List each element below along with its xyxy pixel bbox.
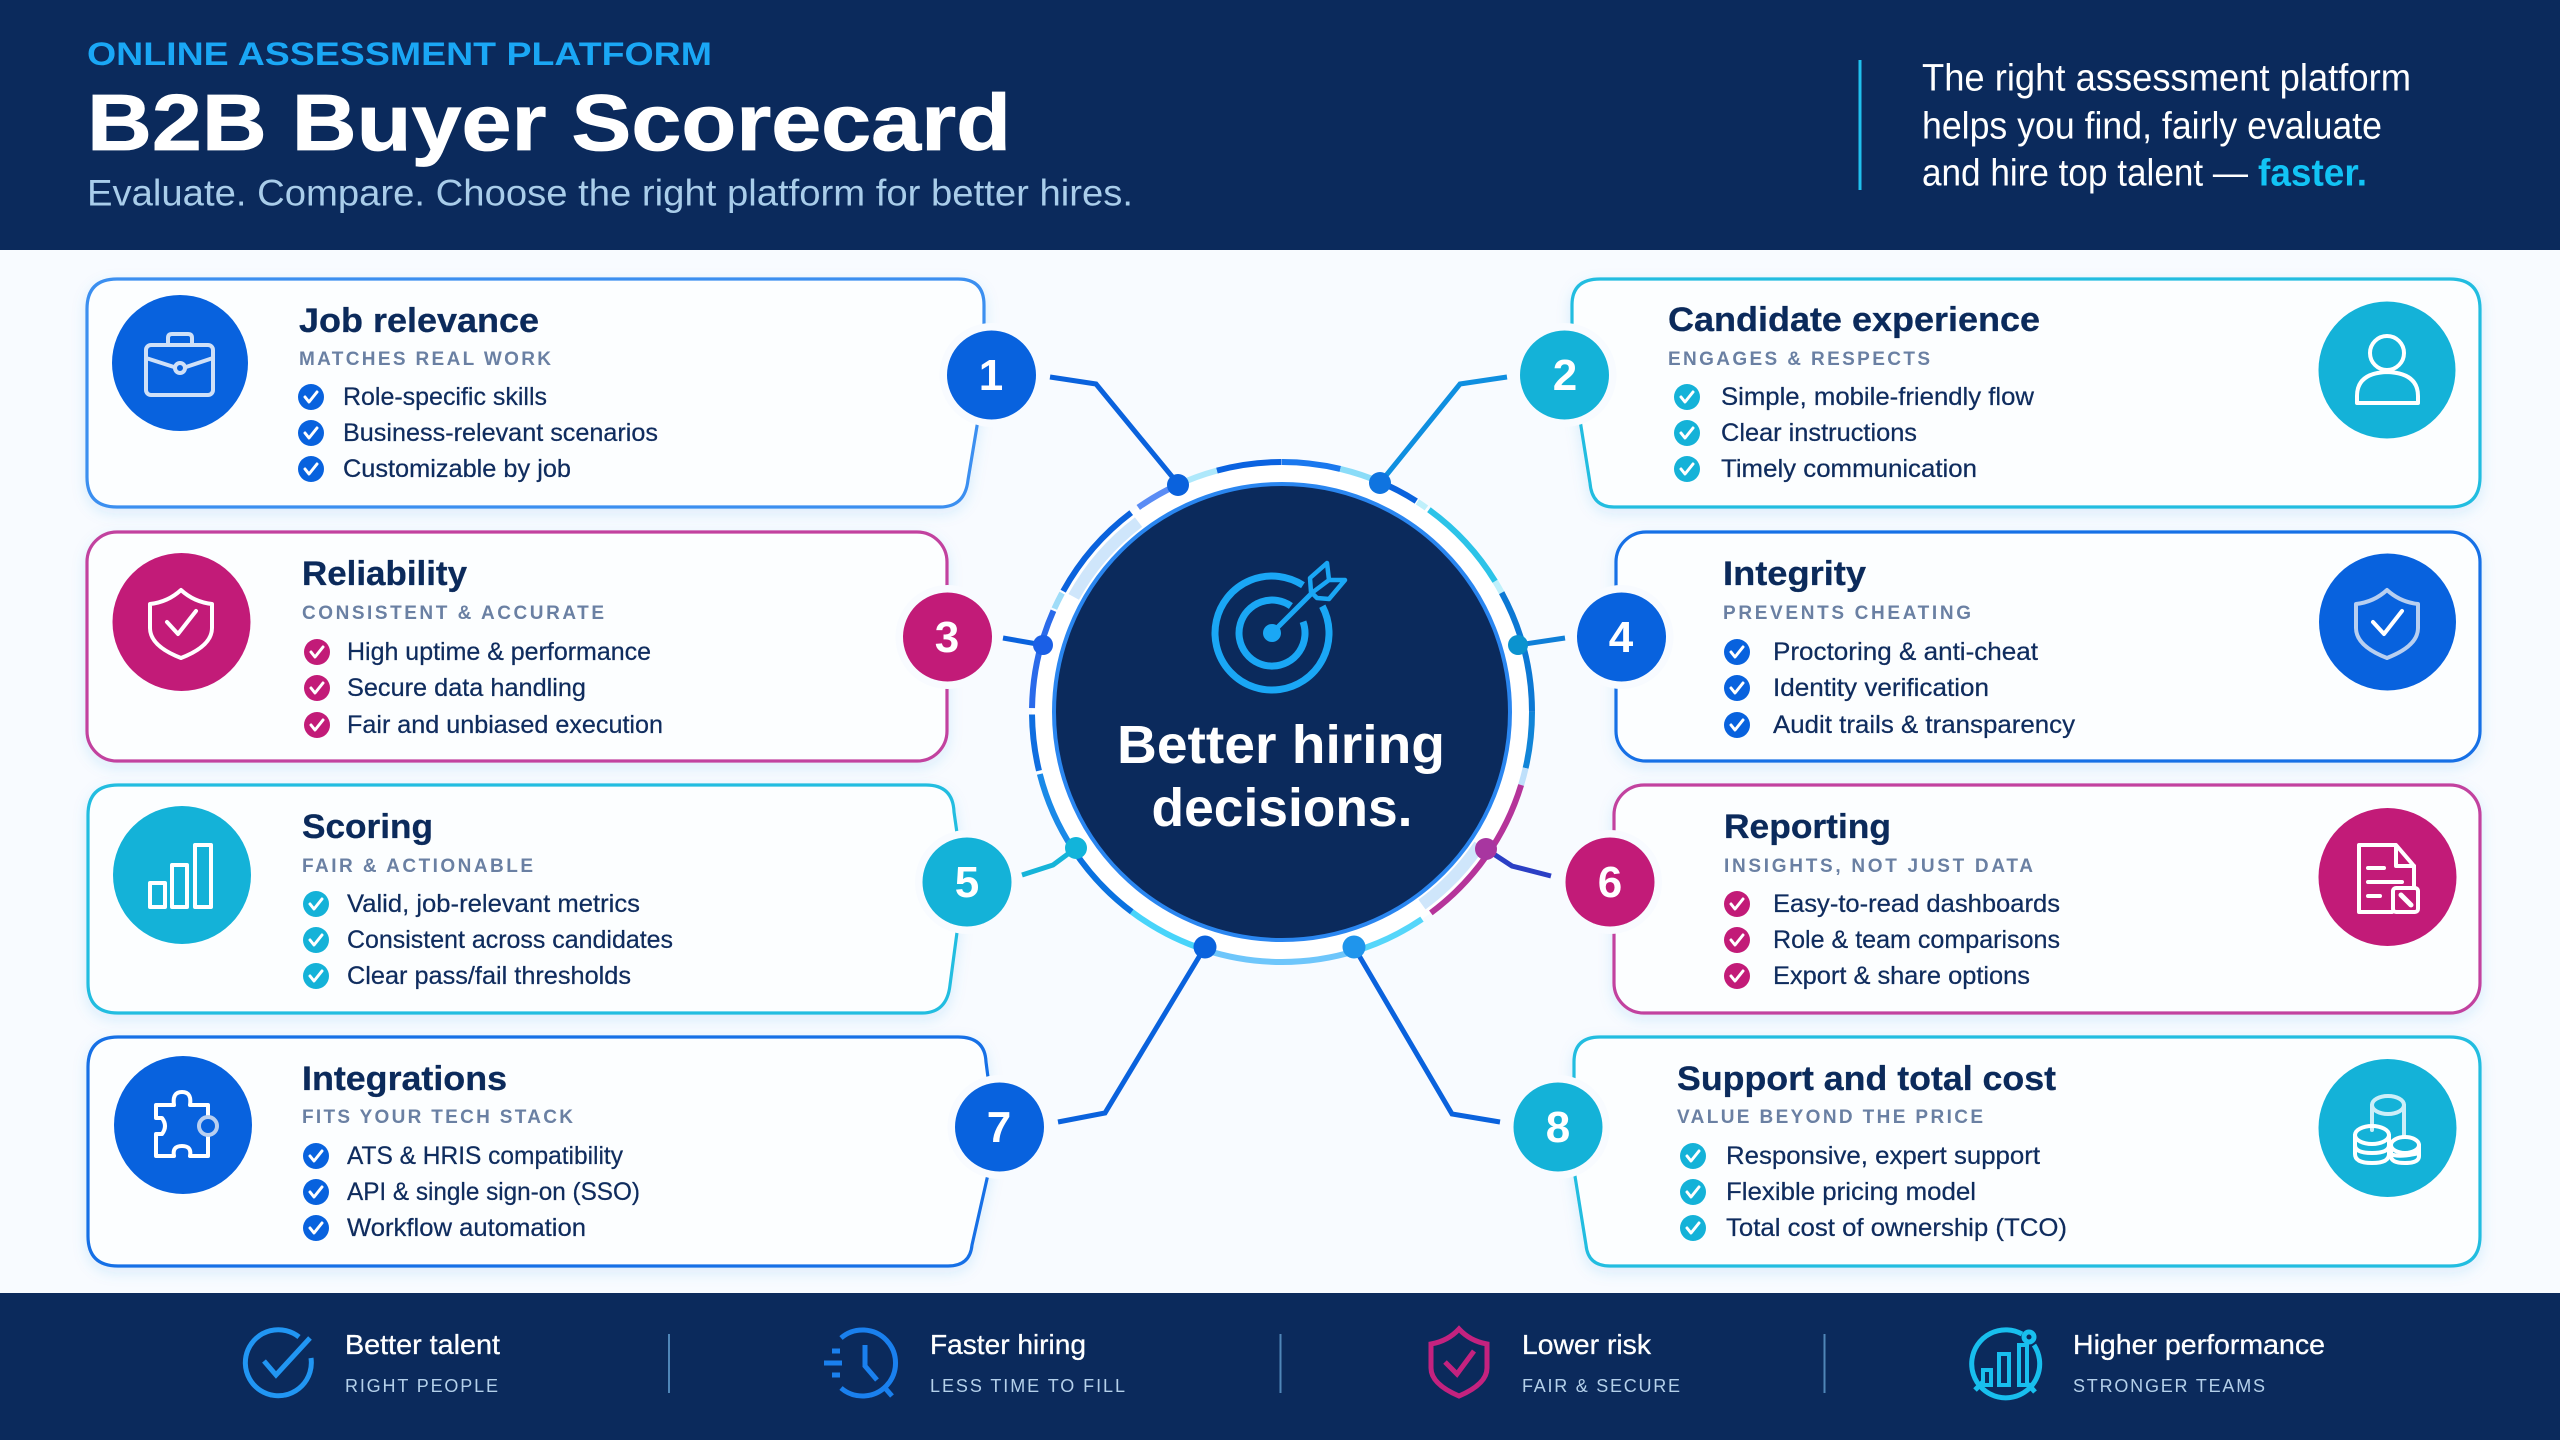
- footer item: better talent: [245, 1329, 500, 1396]
- heading: Reliability: [302, 555, 467, 593]
- footer item: better talent: RIGHT PEOPLE: [345, 1376, 498, 1396]
- header statement: The right assessment platform: [1922, 58, 2411, 100]
- number badges: 4: [1609, 613, 1634, 662]
- panel: candidate experience: [1572, 279, 2480, 507]
- footer item: higher performance: STRONGER TEAMS: [2073, 1376, 2265, 1396]
- header divider: [1858, 60, 1862, 190]
- list: Business-relevant scenarios: [343, 419, 658, 447]
- number badges: 5: [955, 858, 979, 907]
- center statement: Better hiring: [1117, 715, 1445, 775]
- list: High uptime & performance: [347, 638, 651, 666]
- icon: coins: [2318, 1059, 2456, 1197]
- list: ATS & HRIS compatibility: [347, 1142, 623, 1170]
- header statement: helps you find, fairly evaluate: [1922, 106, 2382, 148]
- header statement: and hire top talent —: [1922, 152, 2248, 194]
- footer item: faster hiring: [824, 1329, 1125, 1396]
- title: B2B Buyer Scorecard: [87, 78, 1011, 167]
- header band: [0, 0, 2560, 250]
- center circle: [1054, 484, 1510, 940]
- list: [298, 383, 658, 483]
- number badges: 1: [979, 351, 1003, 400]
- icon: performance chart: [1972, 1330, 2040, 1398]
- list: Clear instructions: [1721, 419, 1917, 447]
- footer item: better talent: Better talent: [345, 1329, 500, 1360]
- list: Workflow automation: [347, 1214, 586, 1242]
- list: Proctoring & anti-cheat: [1773, 638, 2038, 666]
- list: Total cost of ownership (TCO): [1726, 1214, 2067, 1242]
- list: [303, 890, 673, 990]
- list: Secure data handling: [347, 674, 586, 702]
- list: Responsive, expert support: [1726, 1142, 2040, 1170]
- list: Customizable by job: [343, 455, 571, 483]
- center ring: [1032, 462, 1532, 962]
- number badges: 3: [935, 613, 959, 662]
- heading: Scoring: [302, 808, 433, 846]
- heading: Integrity: [1723, 555, 1866, 593]
- list: Fair and unbiased execution: [347, 711, 663, 739]
- icon: user: [2318, 302, 2456, 438]
- list: Clear pass/fail thresholds: [347, 962, 631, 990]
- panel: support and total cost: [1574, 1037, 2480, 1266]
- list: Easy-to-read dashboards: [1773, 890, 2060, 918]
- subheading: MATCHES REAL WORK: [299, 349, 551, 370]
- footer item: lower risk: FAIR & SECURE: [1522, 1376, 1680, 1396]
- list: Simple, mobile-friendly flow: [1721, 383, 2035, 411]
- list: Identity verification: [1773, 674, 1989, 702]
- subheading: FAIR & ACTIONABLE: [302, 856, 533, 877]
- list: [304, 638, 663, 739]
- icon: clock with speed lines: [824, 1330, 896, 1396]
- panel: reliability: [87, 532, 947, 761]
- heading: Reporting: [1724, 808, 1891, 846]
- number badges: 2: [1553, 351, 1577, 400]
- subheading: ENGAGES & RESPECTS: [1668, 349, 1930, 370]
- footer band: [0, 1293, 2560, 1440]
- panel: reporting: [1614, 785, 2480, 1013]
- heading: Job relevance: [299, 302, 539, 340]
- list: Consistent across candidates: [347, 926, 673, 954]
- subheading: VALUE BEYOND THE PRICE: [1677, 1107, 1983, 1128]
- list: Timely communication: [1721, 455, 1977, 483]
- footer item: lower risk: [1431, 1329, 1680, 1396]
- panel: integrations: [88, 1037, 989, 1266]
- number badges: 8: [1546, 1103, 1570, 1152]
- list: Export & share options: [1773, 962, 2030, 990]
- center statement: decisions.: [1152, 778, 1412, 838]
- list: Role & team comparisons: [1773, 926, 2060, 954]
- footer item: faster hiring: LESS TIME TO FILL: [930, 1376, 1125, 1396]
- number badges: 6: [1598, 858, 1622, 907]
- panel: scoring: [88, 785, 958, 1013]
- icon: puzzle piece: [114, 1056, 252, 1194]
- icon: shield: [2319, 554, 2456, 690]
- center statement: [1117, 715, 1445, 838]
- ring nodes: [1033, 472, 1528, 958]
- footer item: faster hiring: Faster hiring: [930, 1329, 1086, 1360]
- subheading: PREVENTS CHEATING: [1723, 603, 1971, 624]
- heading: Candidate experience: [1668, 301, 2040, 339]
- subtitle: Evaluate. Compare. Choose the right platform for better hires.: [87, 172, 1133, 214]
- connector lines: [1003, 377, 1565, 1122]
- icon: bar chart: [113, 806, 251, 944]
- icon: shield: [112, 553, 250, 691]
- header statement: [1922, 58, 2411, 194]
- list: [1680, 1142, 2067, 1242]
- number badges: 7: [987, 1103, 1011, 1152]
- icon: report document: [2318, 808, 2456, 946]
- list: [303, 1142, 640, 1242]
- footer item: higher performance: Higher performance: [2073, 1329, 2325, 1360]
- icon: check circle: [245, 1330, 311, 1396]
- list: [1724, 638, 2076, 739]
- list: Audit trails & transparency: [1773, 711, 2076, 739]
- icon: briefcase: [112, 295, 248, 431]
- subheading: CONSISTENT & ACCURATE: [302, 603, 604, 624]
- list: Valid, job-relevant metrics: [347, 890, 640, 918]
- list: Flexible pricing model: [1726, 1178, 1976, 1206]
- panel: job relevance: [87, 279, 984, 507]
- heading: Integrations: [302, 1060, 507, 1098]
- panel: integrity: [1616, 532, 2480, 761]
- subheading: FITS YOUR TECH STACK: [302, 1107, 573, 1128]
- list: Role-specific skills: [343, 383, 547, 411]
- icon: target with arrow: [1215, 563, 1345, 690]
- header statement: faster.: [2258, 152, 2367, 194]
- list: [1674, 383, 2035, 483]
- number badges: [896, 323, 1674, 1179]
- subheading: INSIGHTS, NOT JUST DATA: [1724, 856, 2033, 877]
- eyebrow: ONLINE ASSESSMENT PLATFORM: [87, 36, 712, 72]
- list: API & single sign-on (SSO): [347, 1178, 640, 1206]
- list: [1724, 890, 2060, 990]
- heading: Support and total cost: [1677, 1060, 2056, 1098]
- footer item: lower risk: Lower risk: [1522, 1329, 1652, 1360]
- footer item: higher performance: [1972, 1329, 2325, 1398]
- icon: shield check: [1431, 1329, 1487, 1396]
